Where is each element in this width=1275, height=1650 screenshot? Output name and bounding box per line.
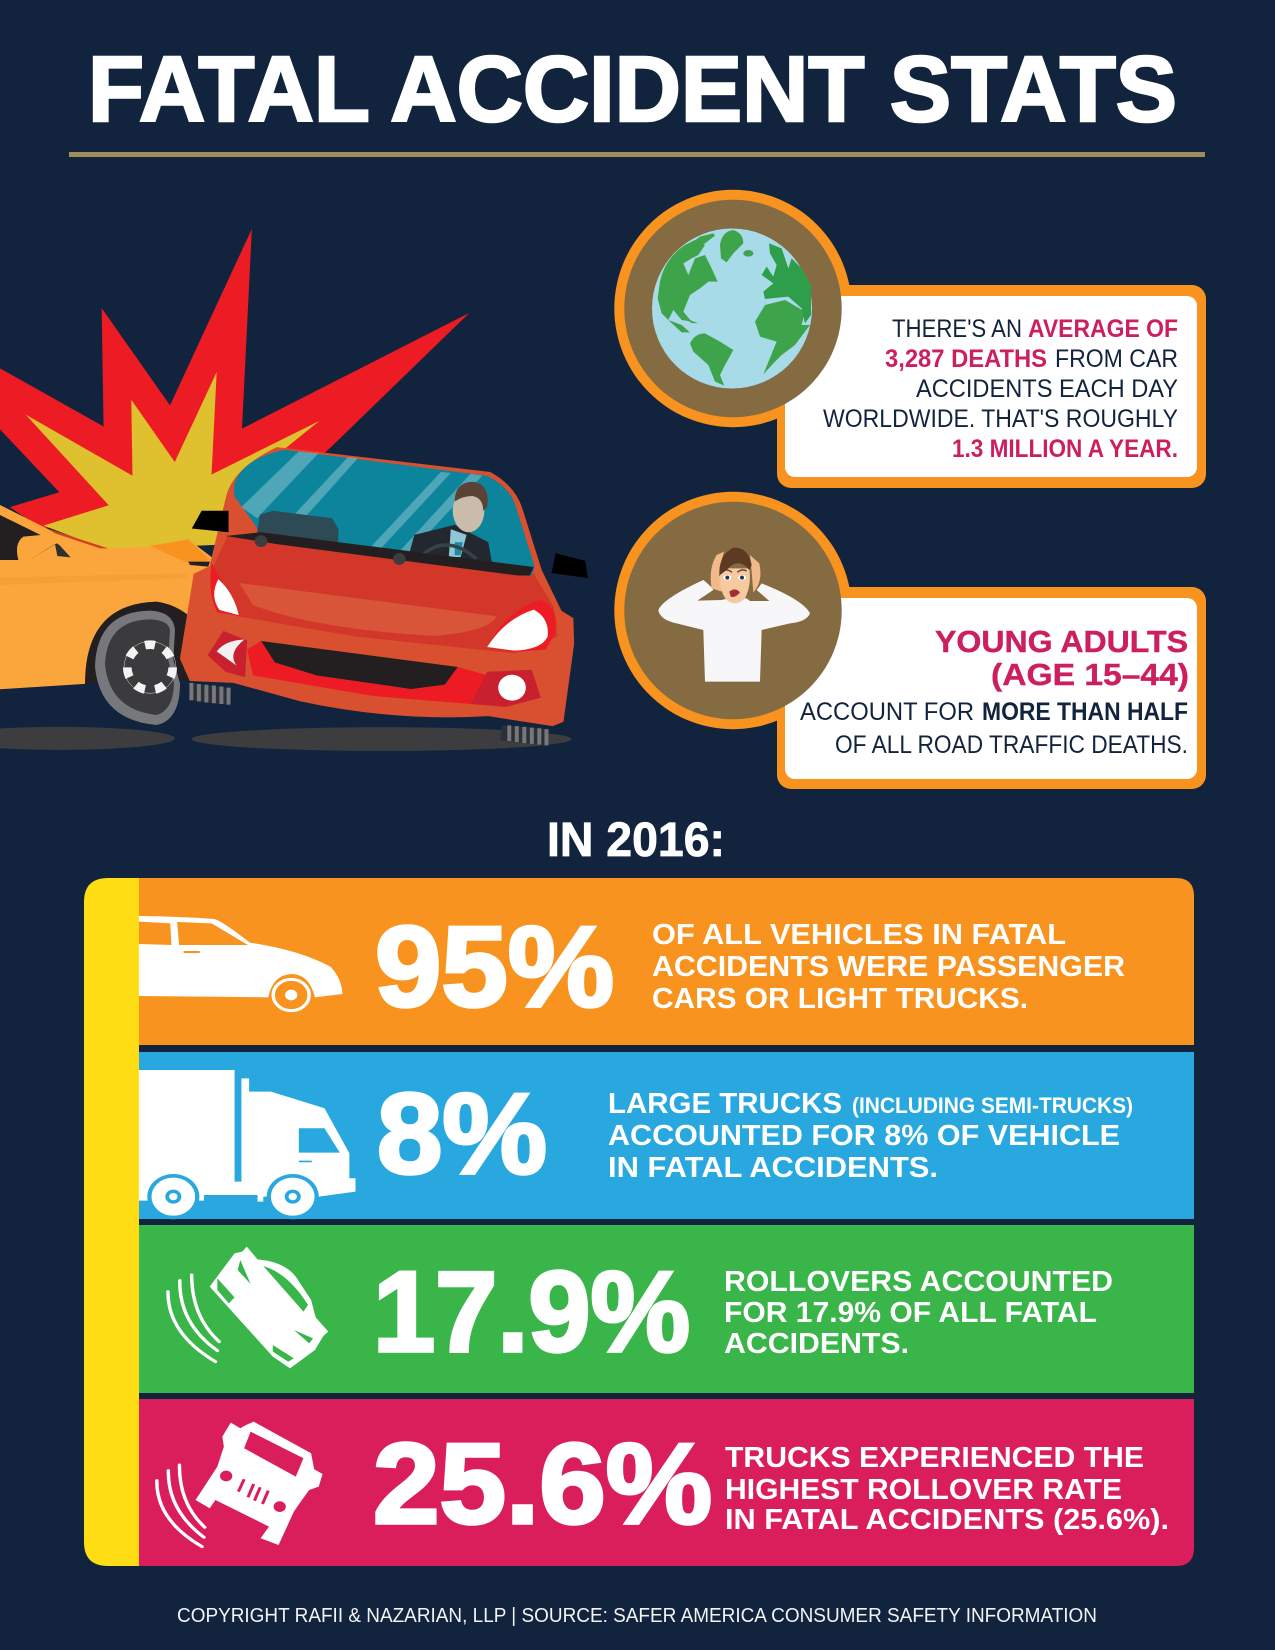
- icon: globe in brown circle: [624, 200, 842, 417]
- orange car: [0, 505, 213, 725]
- panel: young adults: [614, 492, 1206, 789]
- card 2 text: (AGE 15–44): [991, 657, 1189, 692]
- card 1 text: ACCIDENTS EACH DAY: [916, 375, 1178, 403]
- description: [725, 1442, 1169, 1536]
- row: truck rollovers: [139, 1399, 1194, 1566]
- description: ACCIDENTS WERE PASSENGER: [652, 951, 1125, 983]
- description: ROLLOVERS ACCOUNTED: [724, 1266, 1113, 1298]
- card 2 text: [800, 624, 1189, 759]
- card 1 text: WORLDWIDE. THAT'S ROUGHLY: [823, 405, 1178, 433]
- description: ACCOUNTED FOR 8% OF VEHICLE: [608, 1120, 1120, 1152]
- icon: truck: [139, 1070, 355, 1219]
- card 1 text: THERE'S AN: [892, 315, 1022, 343]
- card 2 text: YOUNG ADULTS: [935, 624, 1188, 659]
- description: HIGHEST ROLLOVER RATE: [725, 1474, 1122, 1506]
- row: rollovers: [139, 1225, 1194, 1393]
- description: IN FATAL ACCIDENTS.: [608, 1152, 938, 1184]
- stat: 17.9%: 17.9%: [373, 1249, 690, 1376]
- card 2 with circle backing: [614, 492, 1206, 789]
- card 2 text: MORE THAN HALF: [982, 698, 1188, 726]
- description: [652, 919, 1125, 1015]
- heading: in 2016: IN 2016:: [547, 814, 725, 867]
- row: large trucks: [139, 1052, 1194, 1219]
- panel: worldwide deaths: [614, 190, 1206, 488]
- icon: rolling jeep: [157, 1422, 323, 1547]
- description: CARS OR LIGHT TRUCKS.: [652, 983, 1028, 1015]
- card 1 text: 3,287 DEATHS: [885, 345, 1047, 373]
- red car: [180, 447, 588, 746]
- description: IN FATAL ACCIDENTS (25.6%).: [725, 1504, 1169, 1536]
- card 1 with circle backing: [614, 190, 1206, 488]
- illustration: car crash: [0, 229, 588, 751]
- description: [608, 1088, 1133, 1184]
- description: TRUCKS EXPERIENCED THE: [725, 1442, 1144, 1474]
- card 1 text: [823, 315, 1178, 463]
- stat: 25.6%: 25.6%: [373, 1421, 712, 1548]
- icon: worried person in brown circle: [624, 502, 842, 719]
- description: (INCLUDING SEMI-TRUCKS): [852, 1093, 1133, 1118]
- stat: 95%: 95%: [375, 904, 614, 1031]
- explosion: [0, 229, 469, 550]
- panel: yellow side bar: [84, 878, 139, 1566]
- footer credit: COPYRIGHT RAFII & NAZARIAN, LLP | SOURCE: SAFER AMERICA CONSUMER SAFETY INFORMATION: [177, 1605, 1097, 1627]
- shadows: [0, 727, 571, 751]
- card 1 text: AVERAGE OF: [1028, 315, 1178, 343]
- card 1 text: FROM CAR: [1055, 345, 1178, 373]
- icon: car: [139, 916, 342, 1011]
- card 2 text: OF ALL ROAD TRAFFIC DEATHS.: [835, 731, 1188, 759]
- card 2 text: ACCOUNT FOR: [800, 698, 974, 726]
- description: [724, 1266, 1113, 1360]
- description: ACCIDENTS.: [724, 1328, 909, 1360]
- row: passenger cars: [139, 878, 1194, 1045]
- icon: rolling car: [168, 1247, 328, 1368]
- card 1 text: 1.3 MILLION A YEAR.: [952, 435, 1178, 463]
- description: FOR 17.9% OF ALL FATAL: [724, 1297, 1097, 1329]
- title: FATAL ACCIDENT STATS: [88, 37, 1177, 141]
- description: LARGE TRUCKS: [608, 1088, 842, 1120]
- stat: 8%: 8%: [377, 1071, 547, 1198]
- description: OF ALL VEHICLES IN FATAL: [652, 919, 1066, 951]
